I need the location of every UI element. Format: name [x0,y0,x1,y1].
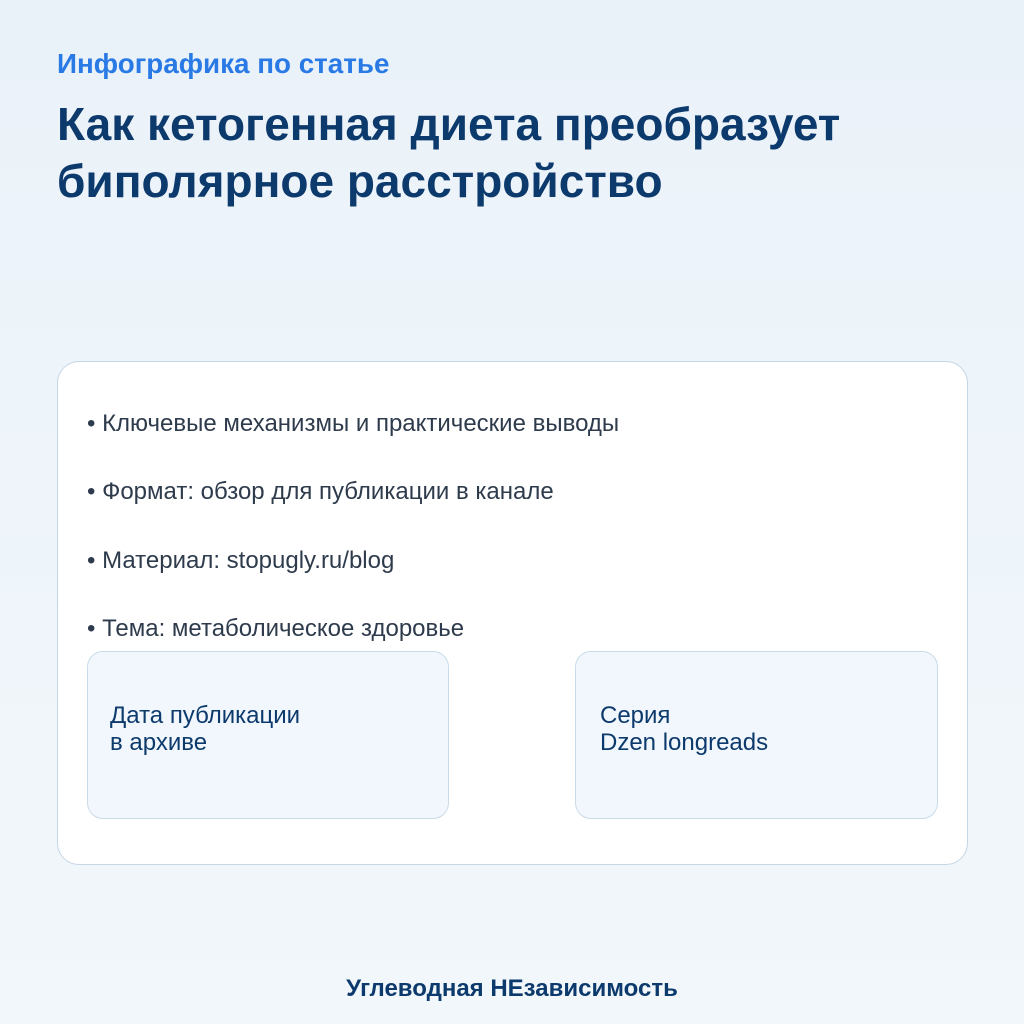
box: date: в архиве [110,729,207,756]
bullet list: • Материал: stopugly.ru/blog [87,547,394,574]
title: Как кетогенная диета преобразует [57,98,840,150]
bullet list: • Тема: метаболическое здоровье [87,615,464,642]
bullet list: • Формат: обзор для публикации в канале [87,478,554,505]
bullet list [87,410,619,642]
box: date [87,651,449,819]
box: series: Dzen longreads [600,729,768,756]
box: series: Серия [600,702,670,729]
bullet list: • Ключевые механизмы и практические выводы [87,410,619,437]
kicker: Инфографика по статье [57,48,389,79]
box: series [575,651,938,819]
box: date: Дата публикации [110,702,300,729]
footer: Углеводная НЕзависимость [346,975,678,1002]
title [57,98,840,207]
panel: main card [57,361,968,865]
title: биполярное расстройство [57,155,663,207]
